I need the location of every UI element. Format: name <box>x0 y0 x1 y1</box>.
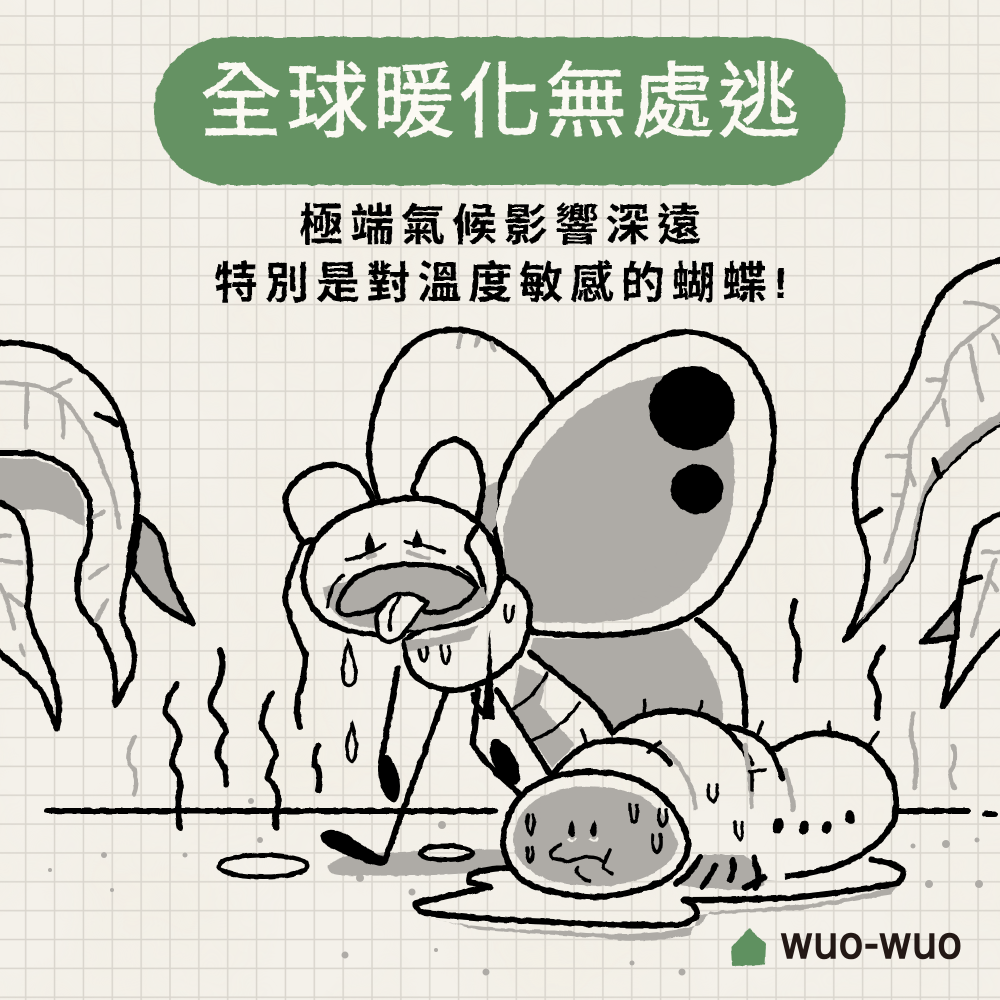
subtitle line 2: 特別是對溫度敏感的蝴蝶! <box>214 259 788 308</box>
foot <box>320 830 388 866</box>
arm blob <box>374 752 404 804</box>
left lower leaf <box>0 501 59 728</box>
caterpillar head <box>503 772 688 897</box>
logo house icon <box>731 928 766 966</box>
drip hook <box>473 695 488 716</box>
first segment line <box>554 741 670 773</box>
caterpillar head grey <box>513 787 678 886</box>
hairs <box>582 700 878 790</box>
black heat lines <box>165 601 883 828</box>
sweat on thorax <box>419 605 513 663</box>
thorax shadow <box>405 625 478 652</box>
falling drops <box>343 643 356 761</box>
front wing <box>493 332 774 635</box>
third segment line <box>729 727 782 778</box>
caterpillar frown <box>550 845 612 881</box>
flat puddle left <box>219 855 307 877</box>
brows <box>347 542 445 560</box>
front wing grey patch <box>503 375 734 623</box>
right leaves <box>845 258 1000 707</box>
right leaf grey tip <box>922 603 957 642</box>
walking leg <box>384 690 447 862</box>
hind wing outline <box>697 620 745 725</box>
caterpillar sweat <box>527 785 743 862</box>
left lower leaf veins <box>0 536 24 655</box>
right lower leaf <box>943 512 1000 707</box>
caterpillar <box>503 700 896 897</box>
second segment fill <box>612 711 760 880</box>
ground shadow <box>328 849 515 876</box>
right upper leaf stub <box>860 510 880 522</box>
heat waves <box>128 601 955 828</box>
left leaves <box>0 343 193 728</box>
mouth <box>338 564 477 615</box>
logo wordmark: wuo-wuo <box>780 918 962 969</box>
spiracle dots <box>771 809 857 836</box>
abdomen edges <box>497 653 615 778</box>
ground <box>47 811 995 876</box>
thorax <box>405 577 530 690</box>
right ear <box>413 440 483 547</box>
left leaf grey band <box>0 458 85 527</box>
abdomen bands <box>510 673 580 740</box>
title text: 全球暖化無處逃 <box>200 57 800 148</box>
flat puddle middle <box>420 846 472 860</box>
left leaf stub <box>97 415 117 424</box>
left ear <box>285 465 373 543</box>
tongue crease <box>390 597 400 630</box>
left leaf veins <box>0 380 119 620</box>
subtitle <box>214 201 788 308</box>
left upper leaf <box>0 343 137 705</box>
right upper leaf <box>845 258 1000 640</box>
ear shadow <box>465 482 498 550</box>
puddle under caterpillar <box>219 846 905 941</box>
right upper leaf shading <box>858 412 1000 625</box>
eyes <box>364 529 422 552</box>
left leaf tip <box>132 517 193 623</box>
wing spot small <box>671 464 723 514</box>
back wing marks <box>458 335 494 350</box>
cheek lines <box>328 567 477 607</box>
leg tuft lines <box>676 857 764 888</box>
rear segment <box>700 733 896 877</box>
leg tuft grey <box>680 855 764 890</box>
right lower leaf stub <box>962 577 980 583</box>
puddle outline <box>416 860 903 925</box>
left arm <box>381 668 398 762</box>
logo <box>731 918 962 969</box>
abdomen grey stripe <box>512 665 575 768</box>
eye shadows <box>368 552 428 558</box>
right upper leaf veins <box>885 303 1000 562</box>
melting left side <box>285 543 305 727</box>
head right melting line <box>468 527 484 605</box>
leg blob <box>484 735 526 789</box>
ground speckles <box>48 798 983 976</box>
body grey streaks <box>660 745 793 810</box>
title pill background <box>154 37 846 185</box>
third segment fill <box>700 727 785 880</box>
second segment line <box>612 711 751 763</box>
head <box>303 498 500 635</box>
subtitle line 1: 極端氣候影響深遠 <box>299 201 701 250</box>
butterfly <box>285 330 774 866</box>
puddle shadow <box>420 880 905 941</box>
hind wing fill <box>530 620 745 735</box>
grey heat lines <box>128 713 955 795</box>
abdomen fill <box>497 653 615 778</box>
ground line <box>47 811 995 814</box>
title banner <box>154 37 846 185</box>
wing spot large <box>649 366 735 450</box>
mouth shadow <box>323 570 490 630</box>
right lower leaf veins <box>972 552 1000 635</box>
thorax drip <box>482 630 495 720</box>
back wing <box>369 330 553 520</box>
caterpillar eyes <box>568 820 597 837</box>
face <box>323 529 490 642</box>
caterpillar eye tears <box>568 838 598 840</box>
hind wing grey <box>530 628 723 732</box>
right legs <box>473 690 525 798</box>
back wing outline <box>369 330 553 497</box>
right leaf inner stub <box>934 460 940 477</box>
first segment fill <box>554 741 720 830</box>
tongue <box>376 594 427 642</box>
